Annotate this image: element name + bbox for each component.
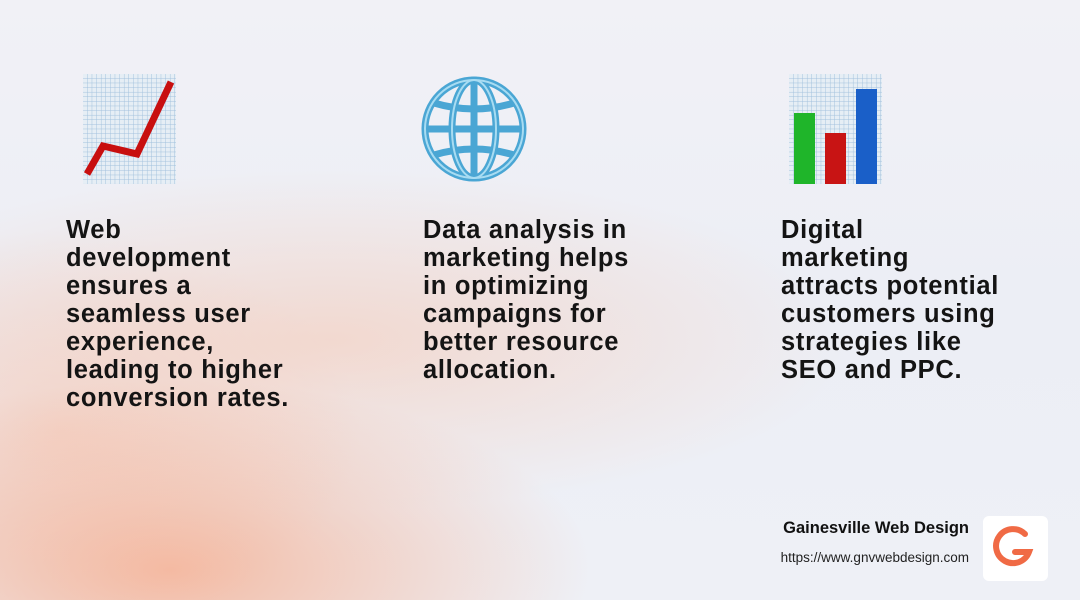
icon: globe	[422, 76, 526, 182]
icon: line chart	[83, 74, 176, 184]
text: web development: development	[66, 244, 231, 272]
text: web development: experience,	[66, 328, 214, 356]
text: digital marketing	[781, 216, 999, 384]
text: web development: Web	[66, 216, 121, 244]
text: data analysis: Data analysis in	[423, 216, 627, 244]
text: digital marketing: marketing	[781, 244, 909, 272]
text: digital marketing: Digital	[781, 216, 864, 244]
text: web development: conversion rates.	[66, 384, 289, 412]
icon: bar chart	[789, 74, 882, 184]
text: data analysis: in optimizing	[423, 272, 589, 300]
text: data analysis	[423, 216, 629, 384]
text: data analysis: allocation.	[423, 356, 557, 384]
text: web development: seamless user	[66, 300, 251, 328]
text: digital marketing: attracts potential	[781, 272, 999, 300]
text: web development: leading to higher	[66, 356, 283, 384]
logo	[983, 516, 1048, 581]
footer brand: Gainesville Web Design	[783, 519, 969, 537]
text: web development: ensures a	[66, 272, 191, 300]
text: digital marketing: customers using	[781, 300, 996, 328]
text: data analysis: better resource	[423, 328, 619, 356]
text: digital marketing: SEO and PPC.	[781, 356, 962, 384]
text: web development	[66, 216, 289, 412]
text: digital marketing: strategies like	[781, 328, 962, 356]
footer brand	[781, 519, 969, 565]
text: data analysis: campaigns for	[423, 300, 606, 328]
footer brand: https://www.gnvwebdesign.com	[781, 550, 969, 565]
text: data analysis: marketing helps	[423, 244, 629, 272]
